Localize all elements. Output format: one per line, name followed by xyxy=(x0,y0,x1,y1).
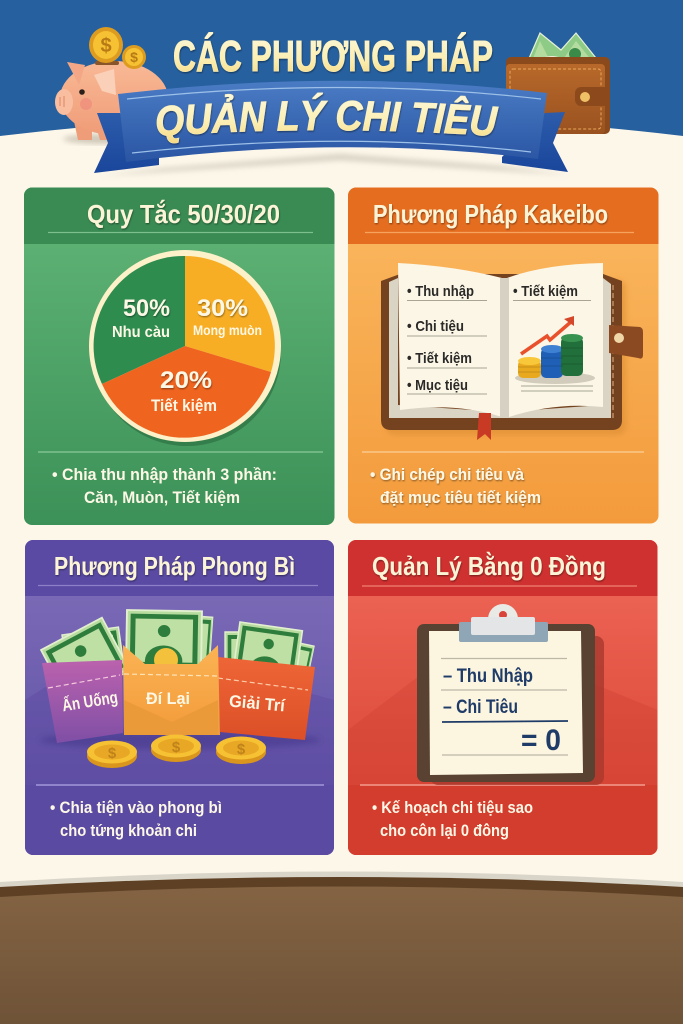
description: • Kế hoạch chi tiệu sao xyxy=(372,798,533,817)
pie label: 50% needs: Nhu càu xyxy=(112,324,170,341)
ledger lines xyxy=(407,300,593,394)
panel: zero-based budgeting xyxy=(348,540,658,855)
description: cho côn lại 0 đông xyxy=(380,821,509,840)
heading: Quản Lý Bằng 0 Đồng xyxy=(372,551,606,581)
icon: coin 2 xyxy=(151,734,201,762)
ledger items: • Thu nhập xyxy=(407,283,474,300)
budget lines: = 0 xyxy=(521,724,561,757)
envelope: transport xyxy=(123,645,220,735)
ledger items: • Mục tiệu xyxy=(407,377,468,394)
pie chart xyxy=(89,250,281,446)
envelope: food: Ấn Uống xyxy=(61,688,119,715)
description: • Chia tiện vào phong bì xyxy=(50,798,222,817)
main title line 2: QUẢN LÝ CHI TIÊU xyxy=(156,92,500,146)
pie label: 30% wants: Mong muòn xyxy=(193,322,262,338)
panel: Kakeibo method xyxy=(348,188,658,524)
icon: large coin: $ xyxy=(100,35,112,57)
ribbon banner xyxy=(94,80,568,175)
pie label: 30% wants xyxy=(193,295,262,338)
pie label: 30% wants: 30% xyxy=(197,295,248,322)
budget lines xyxy=(443,666,561,757)
pie label: 50% needs xyxy=(112,295,170,341)
heading: Quy Tắc 50/30/20 xyxy=(87,199,280,229)
description: đặt mục tiêu tiết kiệm xyxy=(380,488,541,507)
bookmark xyxy=(477,413,491,440)
main title line 1: CÁC PHƯƠNG PHÁP xyxy=(173,31,493,81)
envelope: entertainment: Giải Trí xyxy=(228,692,287,716)
cash: red envelope xyxy=(225,622,314,695)
icon: open ledger book xyxy=(381,263,643,440)
heading: Phương Pháp Phong Bì xyxy=(54,551,295,581)
description: • Chia thu nhập thành 3 phần: xyxy=(52,465,277,484)
header blue background xyxy=(0,0,683,136)
cash: purple envelope xyxy=(41,618,132,706)
footer wooden band xyxy=(0,872,683,1024)
savings growth chart xyxy=(515,316,595,384)
icon: coin 3 xyxy=(216,736,266,764)
description: • Ghi chép chi tiêu và xyxy=(370,465,524,484)
description: Căn, Muòn, Tiết kiệm xyxy=(84,488,240,507)
pie label: 50% needs: 50% xyxy=(123,295,170,322)
envelope: food xyxy=(42,660,123,743)
left ribbon tail xyxy=(94,113,159,173)
heading: Phương Pháp Kakeibo xyxy=(373,199,608,229)
icon: coin 3: $ xyxy=(237,741,246,758)
icon: piggy bank with coins xyxy=(55,27,168,144)
right ribbon tail xyxy=(502,112,568,172)
description xyxy=(52,465,277,507)
ledger items: • Tiết kiệm xyxy=(407,350,472,367)
description xyxy=(50,798,222,840)
description: cho tứng khoản chi xyxy=(60,821,197,840)
wallet clasp xyxy=(609,325,643,359)
ledger items xyxy=(407,283,578,394)
description xyxy=(372,798,533,840)
ledger items: • Tiết kiệm xyxy=(513,283,578,300)
cash: orange envelope xyxy=(126,610,213,677)
pie label: 20% savings: 20% xyxy=(160,367,212,394)
panel: envelope method xyxy=(25,540,334,855)
clipboard clip xyxy=(459,604,548,642)
icon: wallet with cash xyxy=(506,33,610,134)
pie label: 20% savings: Tiết kiệm xyxy=(151,396,217,415)
icon: coin 1: $ xyxy=(108,745,117,762)
description xyxy=(370,465,541,507)
envelope: entertainment xyxy=(218,657,315,740)
icon: clipboard xyxy=(417,604,604,785)
banner body xyxy=(118,81,547,162)
ledger items: • Chi tiệu xyxy=(407,318,464,335)
icon: coin 1 xyxy=(87,740,137,768)
pie label: 20% savings xyxy=(151,367,217,415)
icon: coin 2: $ xyxy=(172,739,181,756)
budget lines: – Thu Nhập xyxy=(443,666,533,687)
icon: small coin: $ xyxy=(130,49,138,65)
budget lines: – Chi Tiêu xyxy=(443,697,518,718)
envelope: transport: Đí Lại xyxy=(146,689,190,708)
panel: 50/30/20 rule xyxy=(24,188,334,525)
illustration: three envelopes with cash xyxy=(40,610,320,768)
